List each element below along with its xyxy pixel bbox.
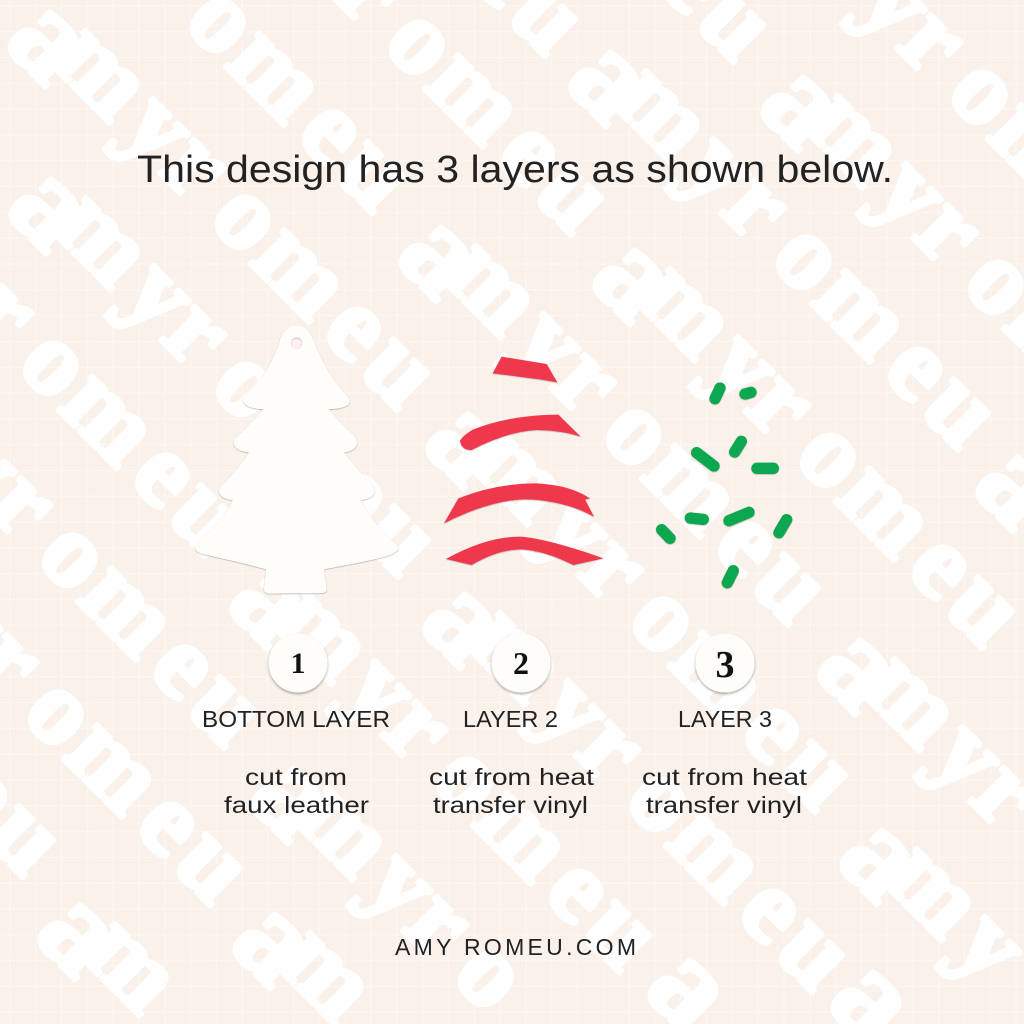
background watermark pattern: a: [792, 594, 934, 736]
description: bottom layer: faux leather: [224, 792, 369, 818]
description: bottom layer: cut from: [245, 764, 347, 790]
title: This design has 3 layers as shown below.: [137, 149, 893, 191]
description: layer 3: cut from heat: [642, 764, 808, 790]
background watermark pattern: a: [814, 784, 956, 926]
number badge 1: 1: [290, 647, 306, 680]
number badge 1: [268, 634, 328, 692]
bottom layer: white tree ornament: [195, 326, 398, 594]
background watermark pattern: my romeu: [450, 398, 884, 831]
description: layer 3: [642, 764, 808, 818]
description: layer 3: transfer vinyl: [646, 792, 802, 818]
background watermark pattern: my romeu: [447, 578, 881, 1011]
background watermark pattern: my romeu: [423, 211, 857, 644]
label: layer 2: LAYER 2: [463, 706, 558, 732]
background watermark pattern: my romeu: [32, 0, 466, 429]
background watermark pattern: a: [735, 31, 877, 173]
background watermark pattern: a: [397, 548, 539, 690]
description: layer 2: transfer vinyl: [433, 792, 588, 818]
number badge 2: [492, 634, 550, 692]
description: layer 2: cut from heat: [429, 764, 595, 790]
label: layer 3: LAYER 3: [678, 706, 772, 732]
background watermark pattern: a: [207, 868, 349, 1010]
background watermark pattern: a: [204, 528, 346, 670]
number badge 3: 3: [716, 644, 734, 686]
background watermark pattern: my romeu: [254, 558, 688, 991]
layer 2: red stripes: [444, 357, 603, 565]
description: layer 2: [429, 764, 595, 818]
number badge 2: 2: [513, 645, 529, 681]
background watermark pattern: a: [373, 181, 515, 323]
layer 3: green sprinkles: [662, 388, 787, 583]
description: bottom layer: [224, 764, 369, 818]
background watermark pattern: my romeu: [33, 163, 467, 596]
background watermark pattern: a: [567, 204, 709, 346]
background watermark pattern: a: [12, 859, 154, 1001]
background watermark pattern: a: [400, 368, 542, 510]
number badge 3: [696, 634, 754, 692]
background watermark pattern: a: [543, 6, 685, 148]
background watermark pattern: my romeu: [593, 36, 1024, 469]
background watermark pattern: my ro: [275, 753, 554, 1024]
label: bottom layer: BOTTOM LAYER: [202, 706, 390, 732]
background watermark pattern: a: [225, 723, 367, 865]
footer website: AMY ROMEU.COM: [395, 934, 636, 960]
